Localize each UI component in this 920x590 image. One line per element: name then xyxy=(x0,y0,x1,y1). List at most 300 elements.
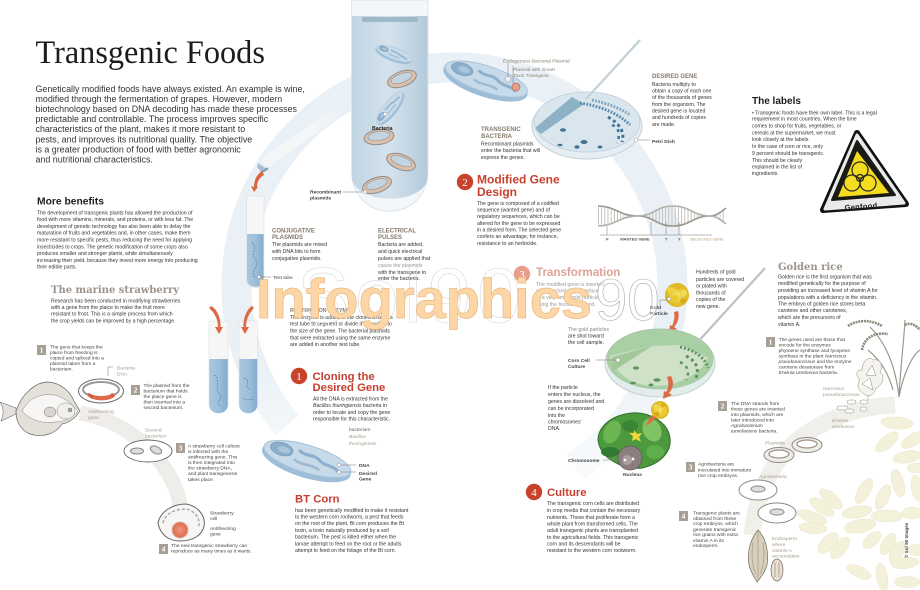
text: labels body: • Transgenic foods have their own label. This is a legal xyxy=(752,111,877,117)
icon: agrobacteria cells xyxy=(739,480,796,523)
number badge 2: 2 xyxy=(462,177,468,189)
text: if the particle enters nucleus: DNA. xyxy=(548,426,560,432)
step 1 xyxy=(0,0,853,376)
text: BT corn body: attempt to feed on the foliage of the Bt corn. xyxy=(295,548,396,554)
step 1: encode for the enzymes xyxy=(779,343,831,349)
text: if the particle enters nucleus: enters the nucleus, the xyxy=(548,392,601,398)
illustration: blue petri dish xyxy=(532,92,642,159)
text: labels body: requirement in most countries. When the time xyxy=(752,117,857,123)
step 4: vitamin A in its xyxy=(693,538,725,544)
step 3: 3 xyxy=(689,462,693,472)
step 3: and plant transgenesis xyxy=(188,471,238,477)
panel: electrical pulses: enter the bacteria. xyxy=(378,276,420,282)
step 3: is infected with the xyxy=(188,449,229,455)
panel: transgenic bacteria xyxy=(481,127,540,161)
intro text block: is a greater production of food with better agronomic xyxy=(36,144,241,154)
step 1: pseudonarcissus and the enzyme xyxy=(779,360,851,365)
icon: small gold particle cluster xyxy=(651,401,669,419)
label: test tube xyxy=(258,275,293,281)
icon: plasmid rings xyxy=(764,438,822,462)
step 1: 1 xyxy=(769,338,773,346)
step 4: 4 xyxy=(162,544,166,554)
panel: desired gene: Bacteria multiply to xyxy=(652,82,696,88)
illustration: DNA double helix: T xyxy=(665,236,668,242)
icon: Erwinia bacteria xyxy=(837,400,868,413)
number badge 3 xyxy=(514,266,530,282)
labels: DNA, desired gene: Gene xyxy=(359,477,372,483)
panel: restriction enzymes: The enzyme is added to the cloned DNA in a xyxy=(290,315,393,321)
text: more benefits body: insecticides to crops. The genetic modification of some crops also xyxy=(37,244,188,250)
label: Narcissus pseudonarcissus: Narcissus xyxy=(823,386,845,392)
heading: transformation: Transformation xyxy=(536,266,620,279)
step 4: The new transgenic strawberry can xyxy=(171,543,247,549)
text: labels body: 9 percent should be transgenic. xyxy=(752,151,824,157)
step 4: crop embryos, which xyxy=(693,521,738,527)
text: BT corn body: to the western corn rootworm, a pest that feeds xyxy=(295,514,404,520)
step 1: copied and spliced into a xyxy=(50,356,104,362)
text: more benefits body: more resistant to specific pests, thus reducing the need for applying xyxy=(37,237,192,243)
label: plasmids: Plasmids xyxy=(765,440,785,446)
illustration: large test tube with bacteria xyxy=(352,0,428,211)
panel: restriction enzymes xyxy=(0,0,394,348)
label: corn cell culture xyxy=(568,358,616,370)
heading: the labels: The labels xyxy=(752,96,801,107)
text: gold particles shot: are shot toward xyxy=(568,334,604,340)
panel: conjugative plasmids: PLASMIDS xyxy=(272,235,303,241)
panel: desired gene: are made. xyxy=(652,122,675,128)
text: golden rice body: carotene and other carotenes, xyxy=(778,308,847,314)
step 4: endosperm. xyxy=(693,543,719,549)
grey path linking rice steps xyxy=(752,405,895,535)
text: modified gene body: in a desired form. The selected gene xyxy=(477,228,561,234)
text: transformation body: of a very small gold particle xyxy=(536,295,599,301)
heading: culture: Culture xyxy=(547,487,587,499)
text: hundreds of gold particles: Hundreds of gold xyxy=(696,270,736,276)
text: cloning body: responsible for this characteristic. xyxy=(313,417,390,423)
label: Erwinia uredovora: Erwinia xyxy=(832,418,848,424)
intro text block: pests, and improves its nutritional quality. The objective xyxy=(36,134,252,144)
panel: step 4 culture xyxy=(0,0,642,554)
test tube left xyxy=(209,321,228,413)
arrow left xyxy=(209,306,223,334)
panel: desired gene: desired gene is located xyxy=(652,108,705,114)
text: golden rice body: Golden rice is the first organism that was xyxy=(778,275,872,281)
panel: step 2 modified gene design xyxy=(0,0,563,247)
panel: electrical pulses: and quick electrical xyxy=(378,249,422,255)
step 1: synthase in the plant Narcissus xyxy=(779,355,846,360)
text: if the particle enters nucleus: genes are dissolved and xyxy=(548,399,604,405)
text: culture body: adult transgenic plants are transplanted xyxy=(547,528,638,534)
panel: electrical pulses: Bacteria are added, xyxy=(378,242,423,248)
text: cloning body: All the DNA is extracted from the xyxy=(313,396,388,402)
text: hundreds of gold particles: particles are covered xyxy=(696,277,744,283)
labels: chromosome, nucleus: Nucleus xyxy=(623,472,642,478)
label: recombinant plasmids xyxy=(310,190,367,201)
text: labels body: look closely at the labels. xyxy=(752,137,810,143)
label: bacterium Bacillus thuringiensis: thuringiensis xyxy=(349,441,377,447)
illustration: narcissus flower xyxy=(857,358,883,400)
bacterium middle xyxy=(372,88,409,129)
text: transformation body: The modified gene is inserted xyxy=(536,282,604,288)
step 2: these genes are inserted xyxy=(731,407,785,413)
watermark: Infographics90 xyxy=(256,251,660,339)
step 3: A strawberry cell culture xyxy=(188,443,240,449)
panel: restriction enzymes: that were extracted using the same enzyme xyxy=(290,336,390,342)
icon: bacterial DNA plasmid ring xyxy=(78,379,124,403)
icon: second bacterium cell xyxy=(124,440,172,462)
heading: modified gene design: Modified Gene xyxy=(477,172,560,186)
labels: strawberry cell, antifreezing gene: gene xyxy=(210,533,221,538)
panel: conjugative plasmids xyxy=(272,228,327,262)
labels: chromosome, nucleus xyxy=(568,458,642,478)
step 3: rice crop embryos. xyxy=(698,473,738,479)
step 4: reproduce as many times as it wants. xyxy=(171,549,252,555)
step 1: The genes used are those that xyxy=(779,337,846,343)
intro text block: characteristics of the plant, makes it more resistant to xyxy=(36,124,245,134)
heading: BT corn: BT Corn xyxy=(295,494,340,506)
panel: the labels xyxy=(0,0,906,212)
step 2: second bacterium. xyxy=(144,405,183,411)
label: recombinant plasmids: plasmids xyxy=(310,195,331,201)
step 3: inoculated into immature xyxy=(698,467,752,473)
step 2 xyxy=(0,0,191,411)
icon: plaice fish xyxy=(0,382,80,436)
step 4 xyxy=(159,543,252,555)
step 2: The DNA strands from xyxy=(731,401,779,407)
icon: pipette over green dish xyxy=(696,268,765,344)
label: gold particle: Particle xyxy=(650,311,668,317)
text: hundreds of gold particles: or plated with xyxy=(696,284,727,290)
step 4: generate transgenic xyxy=(693,527,737,533)
step 4: rice grains with extra xyxy=(693,532,738,538)
label: second bacterium: Second xyxy=(145,427,162,433)
step 1: 1 xyxy=(40,346,44,354)
panel: transgenic bacteria: express the genes. xyxy=(481,155,525,161)
arrow: gold into cell xyxy=(644,415,656,427)
text: labels body: explained in the list of xyxy=(752,165,802,171)
text: golden rice body: The embryo of golden rice stores beta xyxy=(778,302,865,308)
text: labels body: cereals at the supermarket, we must xyxy=(752,131,836,137)
text: culture body: in crop media that contain the necessary xyxy=(547,508,641,514)
panel: restriction enzymes: are added in another test tube. xyxy=(290,342,361,348)
icon: conjugative test tube xyxy=(246,196,264,288)
icon: pipette dropping into first test tube xyxy=(257,104,344,173)
heading: golden rice: Golden rice xyxy=(778,262,843,273)
step 2: The plasmid from the xyxy=(144,383,190,389)
arrow: dish to cell xyxy=(663,376,673,399)
illustration: DNA double helix: Y xyxy=(678,236,681,242)
label: endosperm: where xyxy=(772,542,786,548)
panel: desired gene: obtain a copy of each one xyxy=(652,88,712,94)
text: marine strawberry intro: resistant to frost. This is a simple process from which xyxy=(51,312,173,318)
label: gold particle xyxy=(650,300,668,317)
text: if the particle enters nucleus: If the particle xyxy=(548,385,578,391)
labels: strawberry cell, antifreezing gene: cell xyxy=(210,516,217,522)
step 1: phytoene synthase and lycopene xyxy=(779,348,850,354)
panel: electrical pulses: pulses are applied that xyxy=(378,256,431,262)
text: culture body: whole plant from transformed cells. The xyxy=(547,522,638,528)
label: gold particle: Gold xyxy=(650,305,661,311)
heading: more benefits: More benefits xyxy=(37,196,104,208)
step 2: Agrobacterium xyxy=(730,423,763,429)
text: golden rice body: modified genetically for the purpose of xyxy=(778,281,866,287)
label: test tube: Test tube xyxy=(273,275,293,281)
text: labels body: ingredients. xyxy=(752,171,779,177)
panel: electrical pulses: cause the plasmids xyxy=(378,263,423,269)
panel: BT corn xyxy=(0,0,410,554)
text: more benefits body: The development of transgenic plants has allowed the production of xyxy=(37,210,193,216)
credit: Sol 90 Images: © Sol 90 Images xyxy=(903,522,909,558)
label: bacteria DNA xyxy=(108,366,135,378)
intro text block: Genetically modified foods have always existed. An example is wine, xyxy=(36,84,305,94)
text: transformation body: using the biolistic method. xyxy=(536,302,596,308)
text: cloning body: Bacillus thuringiensis bacteria in xyxy=(313,403,387,409)
heading: cloning the desired gene: Desired Gene xyxy=(312,382,385,394)
illustration: DNA double helix xyxy=(598,206,726,242)
title: Transgenic Foods xyxy=(36,34,265,70)
labels: DNA, desired gene xyxy=(341,463,377,483)
text: golden rice body: vitamin A. xyxy=(778,322,800,328)
icon: gold particle cluster xyxy=(665,283,689,307)
step 2: bacterium that holds xyxy=(144,388,188,394)
illustration: rice plant xyxy=(848,320,920,397)
text: BT corn body: bacterium. The pest is killed either when the xyxy=(295,534,396,540)
panel: conjugative plasmids: CONJUGATIVE xyxy=(272,228,315,234)
illustration: golden rice grains xyxy=(795,416,920,590)
text: marine strawberry intro: with a gene from the plaice to make the fruit more xyxy=(51,305,165,311)
text: gold particles shot: the cell sample. xyxy=(568,340,604,346)
step 3: is then integrated into xyxy=(188,460,235,466)
text: marine strawberry intro: the crop yields can be improved by a high percentage. xyxy=(51,318,176,324)
text: culture body: The transgenic corn cells are distributed xyxy=(547,501,639,507)
labels: endogenous plasmid, smart toxin plasmid: Endogenous Bacterial Plasmid xyxy=(503,58,570,64)
panel: restriction enzymes: test tube to segment or divide it according to xyxy=(290,322,392,328)
panel: electrical pulses: ELECTRICAL xyxy=(378,228,416,234)
text: BT corn body: has been genetically modified to make it resistant xyxy=(295,508,409,514)
text: if the particle enters nucleus: can be incorporated xyxy=(548,406,594,412)
illustration: DNA double helix: WANTED GENE xyxy=(620,236,650,242)
panel: desired gene: and hundreds of copies xyxy=(652,115,706,121)
text: more benefits body: increasing their yield, because they invest more energy into producing xyxy=(37,258,198,264)
arrow: gold particle down to dish xyxy=(669,311,679,333)
text: more benefits body: development of genetic technology has also been able to delay the xyxy=(37,224,191,230)
text: hundreds of gold particles: thousands of xyxy=(696,291,726,297)
label: bacterium Bacillus thuringiensis: bacterium xyxy=(349,427,370,433)
label: petri dish: Petri Dish xyxy=(652,139,675,145)
step 2: into plasmids, which are xyxy=(731,412,783,418)
step 2: the plaice gene is xyxy=(144,394,182,400)
text: culture body: nutrients. Those that proliferate form a xyxy=(547,515,635,521)
panel: electrical pulses: with the transgene to xyxy=(378,270,426,276)
step 2 xyxy=(0,0,786,434)
number badge 4: 4 xyxy=(531,487,537,499)
step 1: carotene desaturase from xyxy=(779,365,834,371)
label: bacteria DNA: DNA xyxy=(117,372,128,378)
text: golden rice body: providing an increased level of vitamin A for xyxy=(778,288,878,294)
step 4: obtained from these xyxy=(693,516,737,522)
text: hundreds of gold particles: new gene. xyxy=(696,304,720,310)
step 4: Transgenic plants are xyxy=(693,510,740,516)
label: corn cell culture: Culture xyxy=(568,364,585,370)
panel: step 3 transformation xyxy=(0,0,620,308)
panel: desired gene xyxy=(0,0,713,128)
test tube right xyxy=(239,321,258,413)
number badge 2 xyxy=(457,174,473,190)
text: culture body: resistant to the western corn rootworm. xyxy=(547,548,637,554)
panel: restriction enzymes: the size of the gene. The bacterial plasmids xyxy=(290,329,390,335)
labels: chromosome, nucleus: Chromosome xyxy=(568,458,600,464)
text: modified gene body: confers an advantage, for instance, xyxy=(477,234,558,240)
intro text block: predictable and controllable. The process improves specific xyxy=(36,114,269,124)
text: modified gene body: The gene is composed of a codified xyxy=(477,201,559,207)
text: culture body: to the agricultural fields. This transgenic xyxy=(547,535,639,541)
step 1 xyxy=(0,0,105,373)
step 3: 3 xyxy=(179,444,183,452)
labels: DNA, desired gene: DNA xyxy=(359,463,370,469)
step 3: Agrobacteria are xyxy=(698,461,734,467)
heading: modified gene design: Design xyxy=(477,185,517,199)
label: recombinant plasmids: Recombinant xyxy=(310,190,341,196)
text: culture body: corn and its descendants will be xyxy=(547,542,621,548)
labels: endogenous plasmid, smart toxin plasmid: Toxin Transgene xyxy=(513,73,549,79)
step 3 xyxy=(686,461,752,479)
illustration: green petri dish xyxy=(605,329,715,397)
icon: rice seed with endosperm xyxy=(748,530,783,582)
step 1: plaice from freezing is xyxy=(50,350,98,356)
heading: the marine strawberry: The marine strawberry xyxy=(51,285,180,296)
step 1: plasmid taken from a xyxy=(50,361,96,367)
illustration: corn cell with nucleus xyxy=(598,413,670,470)
labels: strawberry cell, antifreezing gene: Antifreezing xyxy=(210,526,236,532)
text: modified gene body: altered for the gene to be expressed xyxy=(477,221,560,227)
step 2: 2 xyxy=(721,402,725,410)
plasmid lower right xyxy=(384,150,418,174)
label: endosperm: accumulates xyxy=(772,553,800,559)
text: cloning body: order to locate and copy the gene xyxy=(313,410,390,416)
process ring: pale blue circular path xyxy=(236,67,672,467)
number badge 1 xyxy=(291,368,307,384)
panel: step 1 cloning the desired gene xyxy=(0,0,392,491)
step 3: the strawberry DNA, xyxy=(188,465,232,471)
bacterium upper xyxy=(373,42,414,68)
text: more benefits body: food with more vitamins, minerals, and proteins, or with less fat. The xyxy=(37,217,193,223)
label: second bacterium: bacterium xyxy=(145,433,166,439)
panel: transgenic bacteria: enter the bacteria that will xyxy=(481,148,540,154)
step 3: antifreezing gene. This xyxy=(188,454,238,460)
arrow: pipette to test tube xyxy=(251,171,264,192)
panel: conjugative plasmids: with DNA bits to form xyxy=(272,249,320,255)
panel: desired gene: from the organism. The xyxy=(652,102,706,108)
text: BT corn body: larvae attempt to feed on the root or the adults xyxy=(295,541,402,547)
labels: endogenous plasmid, smart toxin plasmid xyxy=(503,58,570,84)
text: transformation body: and attached to the surface xyxy=(536,289,599,295)
text: BT corn body: on the root of the plant. Bt corn produces the Bt xyxy=(295,521,405,527)
label: agrobacteria: Agrobacteria xyxy=(759,474,787,480)
illustration: DNA double helix: SELECTED GENE xyxy=(690,236,724,242)
labels: endogenous plasmid, smart toxin plasmid: Plasmid with Smart xyxy=(513,67,555,73)
icon: strawberry cell with gene xyxy=(158,504,204,541)
panel: conjugative plasmids: The plasmids are mixed xyxy=(272,242,327,248)
panel: electrical pulses xyxy=(378,228,431,282)
label: bacterium Bacillus thuringiensis: Bacillus xyxy=(349,434,366,440)
text: more benefits body: produces smaller and stronger plants, while simultaneously xyxy=(37,251,173,257)
step 1: Erwinia uredovora bacteria. xyxy=(779,371,838,376)
icon: long pipette over petri dish xyxy=(586,40,640,99)
watermark: Infographics90: Sol90 xyxy=(297,251,526,339)
icon: Genfood biohazard warning triangle: Genfood xyxy=(844,201,878,212)
label: Erwinia uredovora: uredovora xyxy=(832,424,854,430)
labels: strawberry cell, antifreezing gene: Strawberry xyxy=(210,510,234,516)
number badge 4 xyxy=(526,484,542,500)
illustration: transgenic bacterium xyxy=(439,53,532,110)
step 3 xyxy=(0,0,241,483)
panel: more benefits xyxy=(0,0,199,271)
panel: transgenic bacteria: BACTERIA xyxy=(481,134,513,140)
icon: Genfood biohazard warning triangle xyxy=(823,133,906,212)
label: endosperm: vitamin A xyxy=(772,548,793,554)
step 3: takes place. xyxy=(188,477,214,483)
text: modified gene body: sequence (wanted gene) and of xyxy=(477,208,551,214)
number badge 1: 1 xyxy=(296,371,302,383)
panel: electrical pulses: PULSES xyxy=(378,235,402,241)
plasmid upper xyxy=(385,67,419,91)
label: antifreezing gene: Antifreezing xyxy=(88,409,114,415)
panel: transgenic bacteria: TRANSGENIC xyxy=(481,127,521,133)
text: BT corn body: toxin, a toxin naturally produced by a soil xyxy=(295,528,389,534)
panel: desired gene: of the thousands of genes xyxy=(652,95,712,101)
intro text block: and nutritional characteristics. xyxy=(36,154,153,164)
label: bacteria: Bacteria xyxy=(372,126,393,132)
labels: DNA, desired gene: Desired xyxy=(359,471,377,477)
step 2: tumefaciens bacteria. xyxy=(731,429,778,434)
grey path linking strawberry steps xyxy=(80,413,186,540)
text: more benefits body: maturation of fruits and vegetables and, in other cases, make them xyxy=(37,231,190,237)
text: modified gene body: resistance to an herbicide. xyxy=(477,241,538,247)
step 2: then inserted into a xyxy=(144,400,185,406)
label: petri dish xyxy=(634,138,675,145)
panel: the marine strawberry xyxy=(0,0,252,555)
label: Narcissus pseudonarcissus: pseudonarcissus xyxy=(822,392,860,398)
step 2: 2 xyxy=(134,386,138,394)
panel: desired gene: DESIRED GENE xyxy=(652,74,697,80)
panel: conjugative plasmids: conjugative plasmids. xyxy=(272,256,322,262)
text: more benefits body: their edible parts. xyxy=(37,265,77,271)
step 4 xyxy=(0,0,741,549)
label: endosperm: Endosperm xyxy=(772,536,797,542)
watermark: Infographics90: Infographics xyxy=(256,267,592,330)
text: golden rice body: which are the precursors of xyxy=(778,315,841,321)
label: bacteria DNA: Bacteria xyxy=(117,366,135,372)
text: labels body: In the case of corn or rice, only xyxy=(752,144,823,150)
text: marine strawberry intro: Research has been conducted in modifying strawberries xyxy=(51,298,181,304)
text: hundreds of gold particles: copies of the xyxy=(696,297,726,303)
plasmid middle xyxy=(363,127,395,147)
watermark: Infographics90: 90 xyxy=(595,268,660,333)
intro text block: biotechnology based on DNA decoding has made these processes xyxy=(36,104,298,114)
intro text block: modified through the fermentation of grapes. However, modern xyxy=(36,94,282,104)
panel: restriction enzymes: RESTRICTION ENZYMES xyxy=(290,308,354,314)
text: if the particle enters nucleus: chromosomes' xyxy=(548,420,582,426)
text: labels body: comes to shop for fruits, vegetables, or xyxy=(752,124,842,130)
text: labels body: This should be clearly xyxy=(752,158,803,164)
step 1: The gene that keeps the xyxy=(50,344,103,350)
step 1: bacterium. xyxy=(50,367,73,373)
illustration: bacterium with DNA xyxy=(258,432,355,491)
arrow right xyxy=(241,306,254,334)
illustration: DNA double helix: P xyxy=(606,236,609,242)
number badge 3: 3 xyxy=(519,269,525,281)
plasmid lower left xyxy=(360,173,394,197)
